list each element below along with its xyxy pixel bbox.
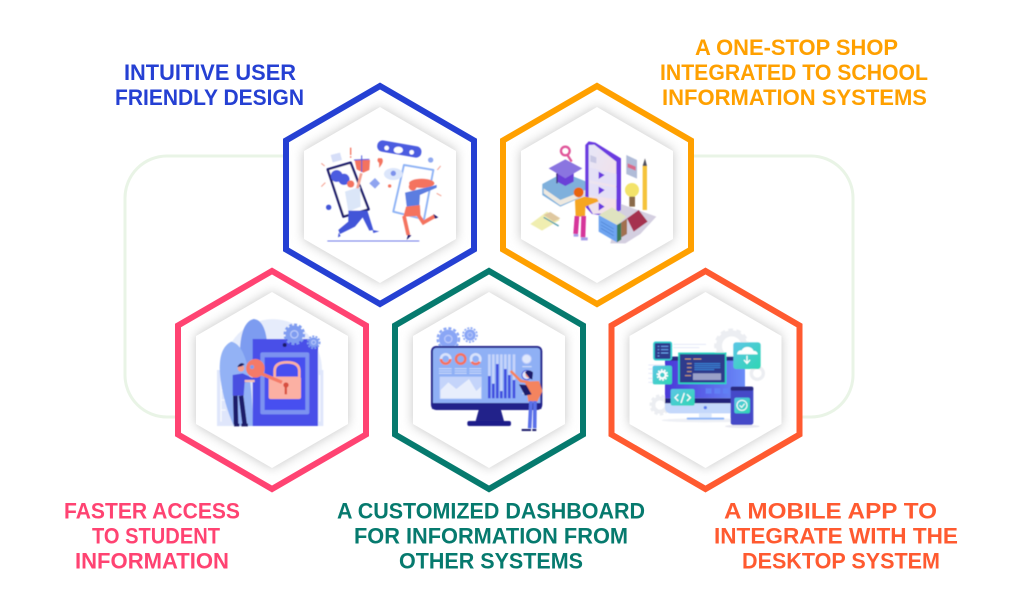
heading: mobile app: DESKTOP SYSTEM <box>742 548 940 574</box>
heading: customized dashboard: FOR INFORMATION FROM <box>354 524 628 548</box>
heading: mobile app <box>714 498 958 574</box>
background rounded connector frame <box>125 156 853 417</box>
panel: faster access hexagon <box>178 271 366 489</box>
heading: customized dashboard: OTHER SYSTEMS <box>399 548 583 574</box>
heading: one-stop shop: A ONE-STOP SHOP <box>695 35 898 60</box>
heading: customized dashboard <box>337 498 645 574</box>
heading: mobile app: A MOBILE APP TO <box>724 498 937 524</box>
icon: books, phone and student <box>530 141 656 243</box>
heading: faster access: FASTER ACCESS <box>64 498 240 524</box>
heading: one-stop shop: INFORMATION SYSTEMS <box>662 85 927 110</box>
heading: intuitive user friendly design: INTUITIVE USER <box>124 60 296 85</box>
heading: faster access: TO STUDENT <box>92 524 221 548</box>
heading: faster access <box>64 498 240 574</box>
heading: customized dashboard: A CUSTOMIZED DASHBOARD <box>337 498 645 524</box>
panel: mobile app hexagon <box>612 271 800 489</box>
heading: intuitive user friendly design: FRIENDLY DESIGN <box>115 85 304 110</box>
panel: customized dashboard hexagon <box>395 271 583 489</box>
icon: people running out of phones <box>321 140 441 241</box>
panel: one-stop shop hexagon <box>503 86 691 304</box>
icon: dashboard monitor with presenter <box>432 328 542 431</box>
heading: intuitive user friendly design <box>115 60 304 110</box>
heading: one-stop shop <box>660 35 928 110</box>
icon: desktop and mobile development <box>648 330 763 428</box>
icon: key opening padlock <box>217 319 323 426</box>
panel: intuitive design hexagon <box>286 86 474 304</box>
heading: faster access: INFORMATION <box>75 548 229 574</box>
heading: mobile app: INTEGRATE WITH THE <box>714 524 958 548</box>
heading: one-stop shop: INTEGRATED TO SCHOOL <box>660 60 928 85</box>
